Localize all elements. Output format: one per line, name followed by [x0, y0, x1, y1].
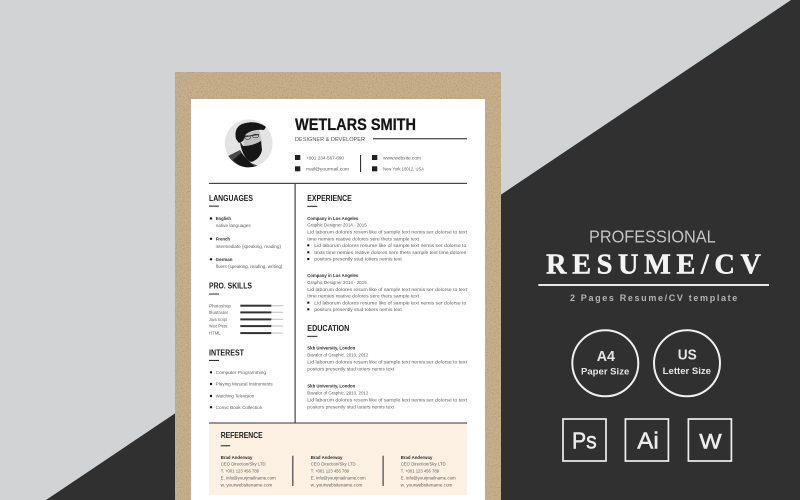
badge: US letter size: US	[678, 346, 697, 363]
section: languages: fluent (speaking, reading, writing)	[216, 264, 283, 269]
section: education: Skb University, London	[307, 384, 356, 389]
section: education: positors presently stud totiers nemis text	[307, 366, 395, 371]
icon: Word: W	[699, 430, 722, 453]
reference 3: CEO Direction/Sky LTD	[401, 462, 446, 467]
icon: Photoshop	[563, 419, 606, 461]
section: interest	[209, 348, 274, 410]
reference 1	[221, 455, 276, 488]
reference 1: E. info@yourjmailname.com	[221, 476, 276, 481]
section: education: EDUCATION	[307, 324, 349, 333]
reference 2: E. info@yourjmailname.com	[311, 476, 366, 481]
section: experience: EXPERIENCE	[307, 194, 352, 203]
title: professional: PROFESSIONAL	[589, 227, 716, 247]
reference 3: w. yourwebsitename.com	[401, 483, 453, 488]
contact details: New York 10012, USA	[383, 166, 424, 172]
reference 2: w. yourwebsitename.com	[311, 483, 363, 488]
section: languages	[209, 194, 283, 269]
subtitle: 2 Pages Resume/CV template	[570, 293, 737, 303]
section: education: Bavalor of Graphic, 2010, 2012	[307, 390, 369, 395]
section: experience: time nemies reative dolores sere thets sample text	[307, 236, 420, 241]
reference 2: CEO Direction/Sky LTD	[311, 462, 356, 467]
section: pro skills: PRO. SKILLS	[209, 282, 253, 291]
section: experience: Company in Los Angeles	[307, 216, 359, 221]
section: pro skills	[209, 282, 283, 336]
contact details: www.website.com	[383, 156, 421, 160]
panel: reference	[209, 424, 467, 495]
section: experience: Lid laborum dolores resum like of sample text nemis ser dolorse to text	[307, 287, 468, 292]
section: experience: positors presently stud totiers nemis text	[314, 307, 403, 312]
section: education	[307, 324, 468, 409]
section: experience: Graphic Designer 2014 - 2015	[307, 280, 367, 285]
section: experience: Company in Los Angeles	[307, 273, 359, 278]
reference 2	[311, 455, 366, 488]
contact details	[295, 155, 424, 172]
section: education: Lid laborum dolores resum like of sample text nemis ser dolorse to text	[307, 359, 468, 364]
icon: Illustrator: Ai	[637, 427, 659, 453]
section: languages: LANGUAGES	[209, 194, 254, 203]
section: experience: time nemies reative dolores sere thets sample text	[307, 294, 420, 299]
contact details: mail@yourmail.com	[306, 166, 349, 172]
section: interest: INTEREST	[209, 348, 244, 357]
section: experience: positors presently stud totiers nemis text	[314, 257, 403, 262]
section: pro skills: Java Script	[209, 317, 227, 322]
badge: A4 paper size: A4	[597, 348, 616, 365]
section: languages: German	[216, 257, 233, 262]
section: education: Bavalor of Graphic, 2010, 2012	[307, 352, 369, 357]
reference 1: CEO Direction/Sky LTD	[221, 462, 266, 467]
icon: Illustrator	[625, 419, 668, 461]
section: experience: Lid laborum dolores resume like of sample text nemis ser dolorse to	[314, 300, 467, 305]
job title: DESIGNER & DEVELOPER	[295, 137, 365, 143]
section: pro skills: Word Press	[209, 324, 228, 329]
section: education: Lid laborum dolores resum like of sample text nemis ser dolorse to text	[307, 397, 468, 402]
resume sheet	[191, 99, 485, 500]
skill bars	[240, 305, 283, 334]
badge: A4 paper size: Paper Size	[581, 367, 629, 378]
badge: US letter size	[654, 330, 720, 396]
section: languages: intermediate (speaking, reading)	[216, 244, 282, 249]
icon: Photoshop: Ps	[572, 427, 597, 453]
reference 1: T. +001 123 456 789	[221, 469, 260, 474]
reference 3: Brad Anderway	[401, 455, 433, 460]
badge: US letter size: Letter Size	[663, 366, 711, 377]
section: interest: Playing Musical Instruments	[216, 382, 274, 387]
icon: portrait avatar	[224, 120, 272, 168]
panel: reference: REFERENCE	[221, 431, 263, 440]
section: experience	[307, 194, 468, 312]
title: resume/cv: RESUME/CV	[546, 249, 761, 280]
reference 2: T. +001 123 456 789	[311, 469, 350, 474]
section: experience: Graphic Designer 2014 - 2015	[307, 223, 367, 228]
reference 1: w. yourwebsitename.com	[221, 483, 273, 488]
reference 1: Brad Anderway	[221, 455, 253, 460]
section: pro skills: Illustrator	[209, 310, 229, 315]
reference 3: T. +001 123 456 789	[401, 469, 440, 474]
section: pro skills: Photoshop	[209, 303, 232, 308]
section: languages: native languages	[216, 223, 252, 228]
section: experience: texts time nemies reative dolores sere thets sample text time dolores	[314, 250, 467, 255]
section: languages: French	[216, 236, 230, 241]
section: interest: Watching Television	[216, 394, 255, 399]
section: languages: English	[216, 216, 231, 221]
reference 3	[401, 455, 456, 488]
section: education: positors presently stud totiers nemis text	[307, 404, 395, 409]
reference 2: Brad Anderway	[311, 455, 343, 460]
name heading: WETLARS SMITH	[295, 115, 416, 134]
section: education: Skb University, London	[307, 346, 356, 351]
section: pro skills: HTML	[209, 331, 221, 336]
section: experience: Lid laborum dolores resum like of sample text nemis ser dolorse to text	[307, 230, 468, 235]
reference 3: E. info@yourjmailname.com	[401, 476, 456, 481]
icon: Word	[688, 419, 731, 461]
section: interest: Computer Programming	[216, 370, 267, 375]
section: experience: Lid laborum dolores resume like of sample text nemis ser dolorse to	[314, 243, 467, 248]
section: interest: Comic Book Collection	[216, 405, 263, 410]
contact details: +001 234-567-890	[306, 156, 345, 160]
badge: A4 paper size	[572, 330, 638, 396]
kraft paper backing	[175, 72, 501, 500]
